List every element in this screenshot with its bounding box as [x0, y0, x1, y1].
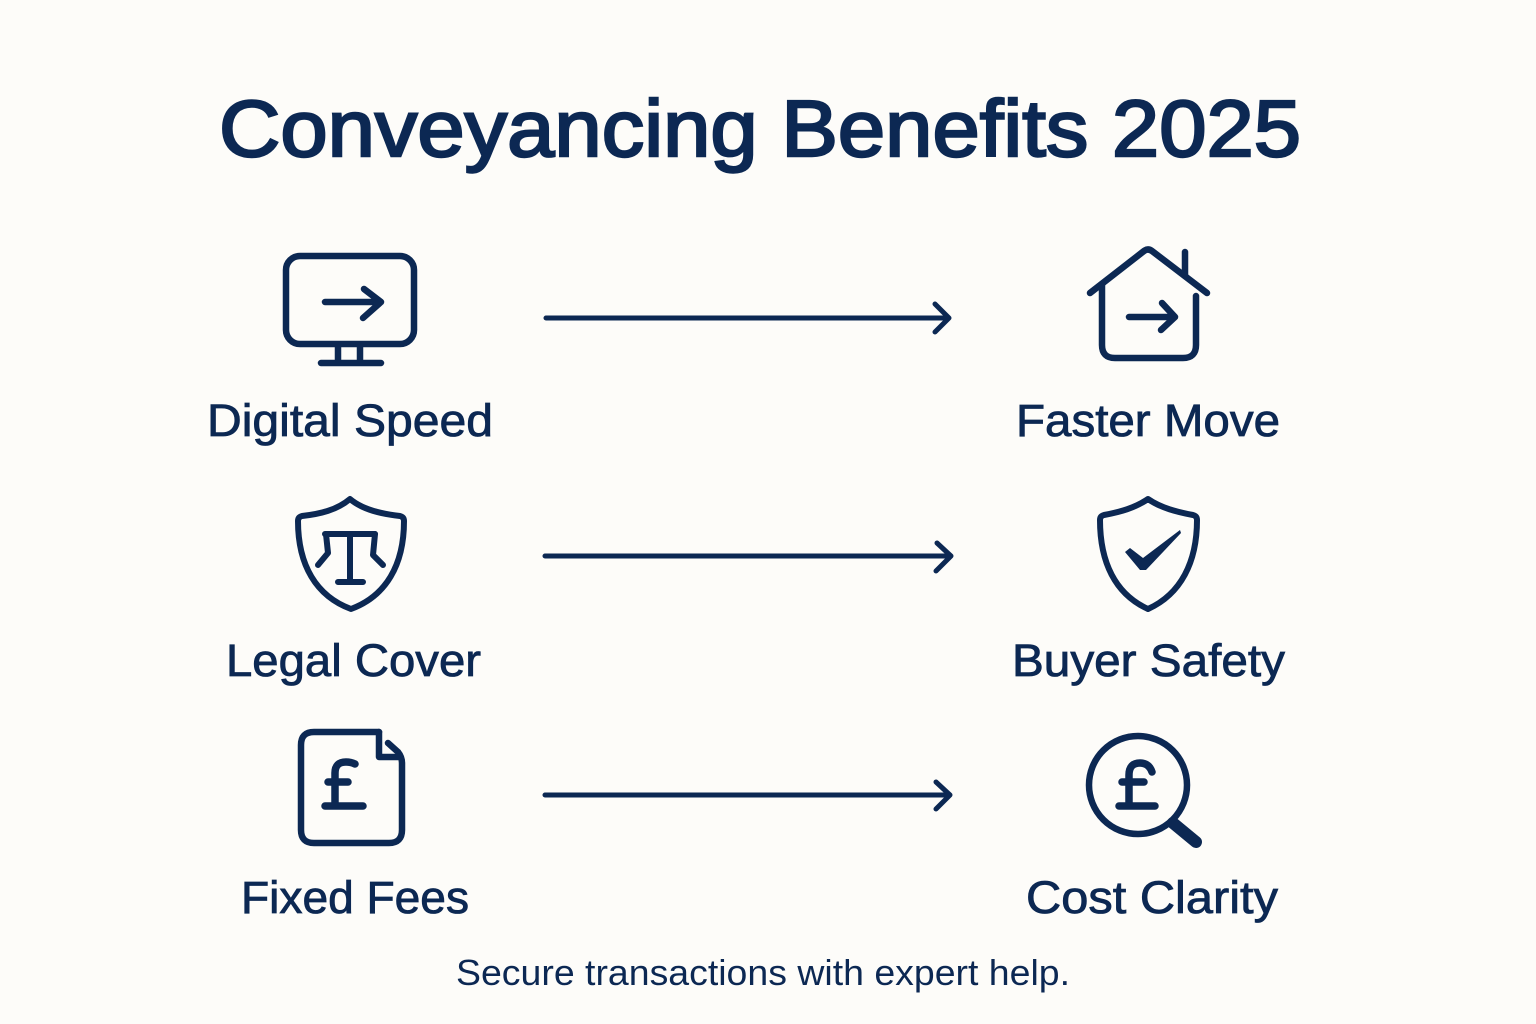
icon: monitor with arrow: [286, 256, 414, 363]
arrow: fixed fees to cost clarity: [545, 782, 950, 809]
row 3: fixed fees to cost clarity: [241, 732, 1279, 923]
icon: magnifier with pound: [1089, 736, 1196, 842]
title: Conveyancing Benefits 2025: [219, 84, 1301, 173]
label: Buyer Safety: Buyer Safety: [1012, 635, 1286, 686]
label: Legal Cover: Legal Cover: [226, 635, 481, 686]
icon: house with arrow: [1090, 250, 1207, 358]
label: Digital Speed: Digital Speed: [207, 395, 493, 446]
arrow: digital speed to faster move: [546, 304, 949, 332]
row 2: legal cover to buyer safety: [226, 499, 1286, 686]
footer text: Secure transactions with expert help.: [456, 952, 1070, 993]
label: Fixed Fees: Fixed Fees: [241, 872, 469, 923]
label: Faster Move: Faster Move: [1016, 395, 1280, 446]
row 1: digital speed to faster move: [207, 250, 1280, 446]
icon: shield with scales: [298, 499, 404, 609]
icon: document with pound: [301, 732, 402, 843]
arrow: legal cover to buyer safety: [545, 543, 951, 571]
icon: shield with check: [1100, 499, 1197, 609]
label: Cost Clarity: Cost Clarity: [1026, 872, 1279, 923]
